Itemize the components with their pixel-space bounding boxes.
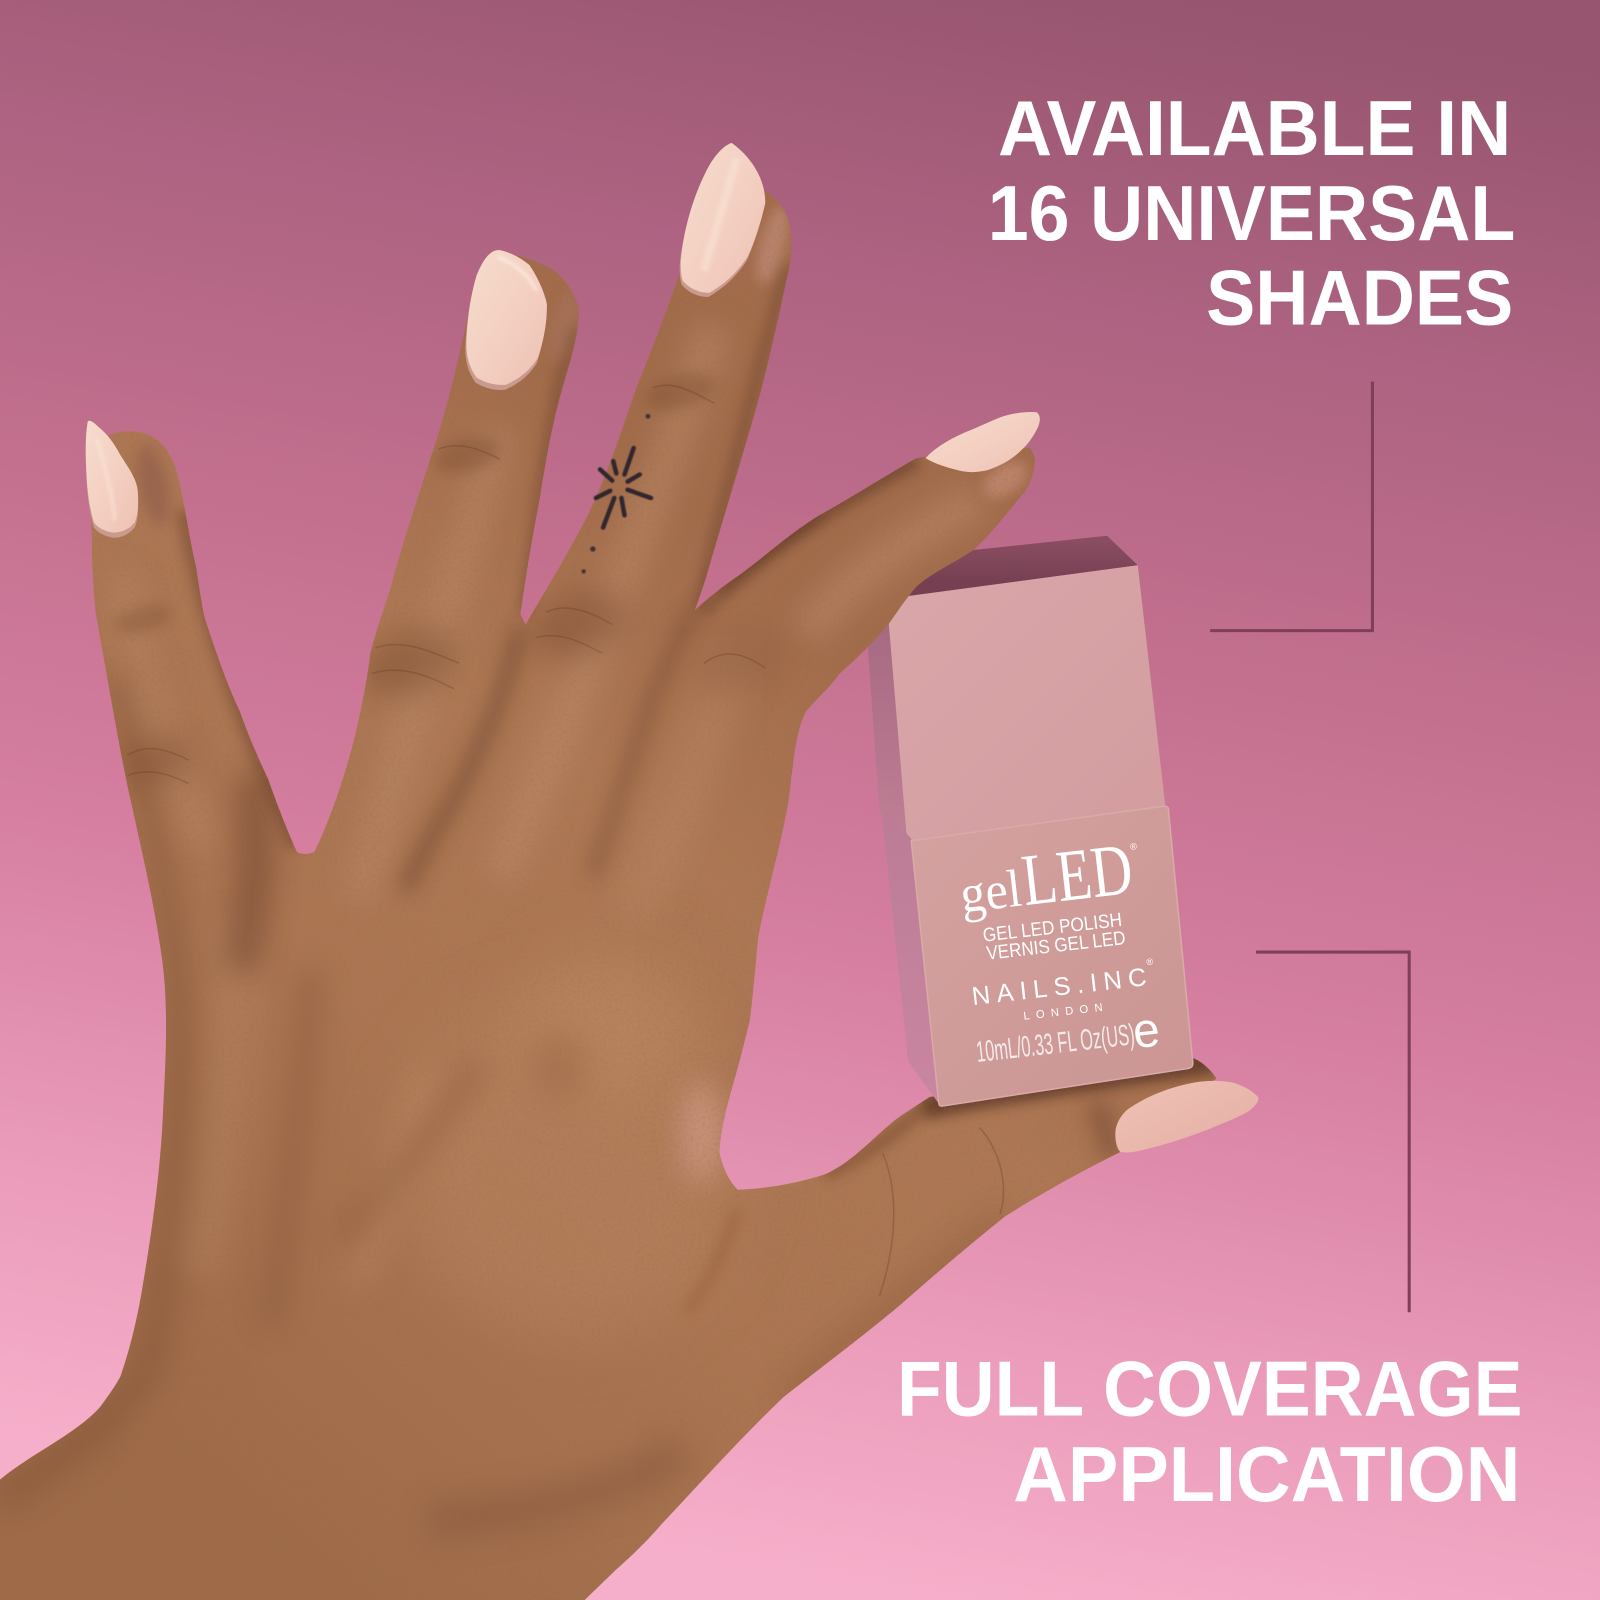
product name in French: VERNIS GEL LED bbox=[985, 927, 1127, 965]
index finger nail bbox=[926, 412, 1040, 472]
product name: GEL LED POLISH bbox=[982, 909, 1123, 947]
knuckle creases bbox=[128, 385, 1003, 1296]
thumb shadows bbox=[923, 1061, 1214, 1107]
heading: full coverage application bbox=[897, 1346, 1522, 1518]
finger separation shadows bbox=[404, 630, 520, 890]
polish cap bbox=[865, 536, 1165, 842]
heading line 2: APPLICATION bbox=[1013, 1432, 1520, 1518]
heading: available in 16 universal shades bbox=[988, 86, 1515, 341]
pinky nail bbox=[86, 421, 138, 538]
estimated sign: e bbox=[1130, 1002, 1163, 1059]
finger edge shadows bbox=[526, 327, 573, 612]
skin texture bbox=[132, 233, 1106, 1218]
finger highlights bbox=[122, 571, 204, 847]
volume: 10mL/0.33 FL Oz(US) bbox=[974, 1018, 1136, 1069]
pink fingertip tones bbox=[753, 204, 790, 286]
left edge shadow bbox=[0, 673, 180, 1500]
polish bottle bbox=[882, 806, 1193, 1106]
brand logo gel: gel bbox=[957, 860, 1025, 924]
hand illustration bbox=[0, 133, 1265, 1600]
ring finger nail bbox=[465, 250, 547, 390]
bottle label text bbox=[953, 827, 1164, 1077]
registered mark: ® bbox=[1130, 841, 1138, 852]
skin shading bbox=[0, 133, 1265, 1600]
heading line 1: AVAILABLE IN bbox=[998, 86, 1511, 172]
cap front face bbox=[887, 565, 1165, 842]
heading line 3: SHADES bbox=[1206, 255, 1513, 341]
London: LONDON bbox=[1023, 1002, 1103, 1023]
bottle front face bbox=[911, 806, 1193, 1106]
cap top face bbox=[887, 536, 1138, 599]
thumb nail bbox=[1115, 1081, 1258, 1152]
heading line 1: FULL COVERAGE bbox=[897, 1346, 1522, 1432]
Nails.INC logo: NAILS.INC bbox=[970, 963, 1148, 1011]
lit back of hand bbox=[453, 1163, 588, 1284]
finger tattoo bbox=[582, 414, 651, 573]
heading line 2: 16 UNIVERSAL bbox=[988, 171, 1515, 257]
connector line: shades callout bbox=[1210, 382, 1372, 631]
middle finger nail bbox=[680, 143, 765, 297]
cap left side bbox=[865, 599, 907, 838]
registered mark on logo: ® bbox=[1146, 956, 1154, 967]
brand logo LED: LED bbox=[1018, 828, 1136, 921]
connector line: coverage callout bbox=[1256, 952, 1409, 1312]
bottle left side bbox=[882, 811, 940, 1105]
hand silhouette bbox=[0, 191, 1216, 1600]
knuckle shading bbox=[365, 624, 460, 702]
tendon shadows bbox=[270, 969, 311, 1327]
